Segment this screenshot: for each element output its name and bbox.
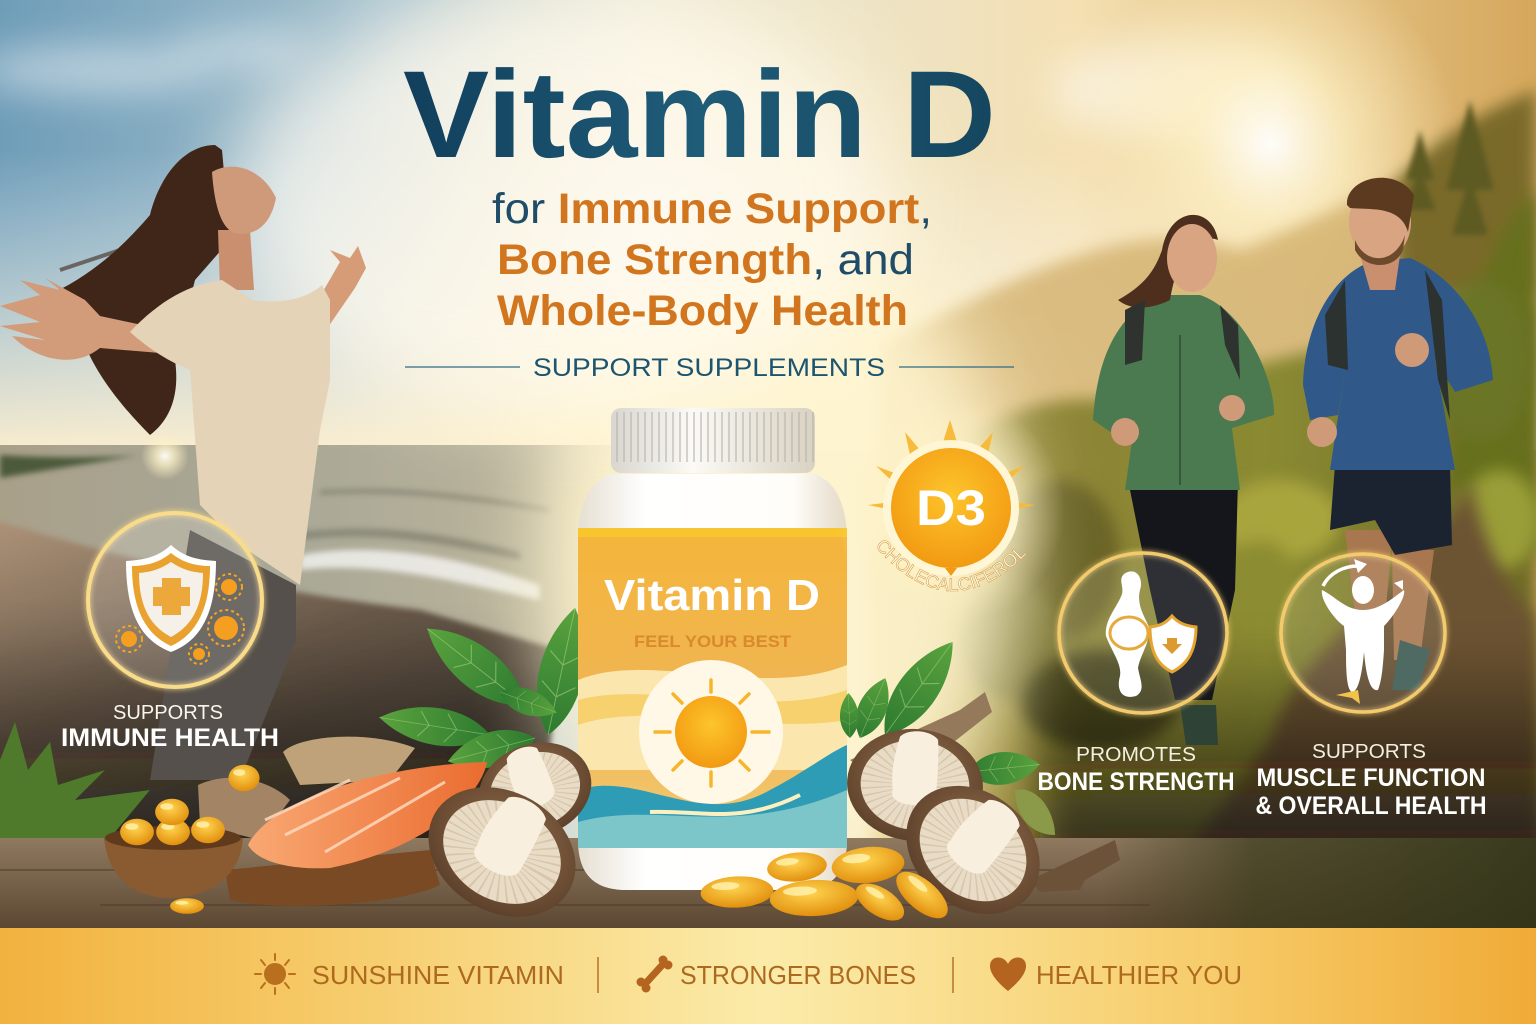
left arm: [0, 278, 175, 360]
supplement bottle: [578, 408, 847, 890]
sea: [0, 445, 760, 680]
benefit: muscle function: & OVERALL HEALTH: [1256, 792, 1486, 820]
mushrooms left: [405, 727, 605, 943]
glow behind bottle: [540, 230, 1020, 890]
shield icon: [1150, 616, 1196, 672]
bottom banner: [0, 928, 1536, 1024]
bottle cap: [611, 408, 815, 473]
title: Vitamin D: [403, 46, 996, 184]
food right: [700, 630, 1120, 941]
wooden table: [0, 838, 1536, 930]
neck: [218, 230, 254, 290]
face: [212, 167, 276, 234]
ring: [1059, 553, 1227, 713]
virus icons: [116, 574, 244, 664]
tagline: SUPPORT SUPPLEMENTS: [533, 354, 885, 382]
joint icon: [1106, 571, 1150, 697]
ring: [1281, 554, 1445, 712]
woman jogger: [1093, 215, 1274, 745]
icon: heart: [990, 957, 1026, 991]
beach foliage: [0, 722, 150, 838]
cholecalciferol arc text: [875, 546, 1034, 591]
bottom darkening: [0, 620, 500, 880]
bowl: [104, 832, 243, 898]
icon: bone: [636, 956, 672, 992]
board: [225, 850, 440, 906]
right arm: [318, 246, 366, 330]
subtitle: Whole-Body Health: [497, 287, 908, 335]
label: PROMOTES: [1076, 744, 1196, 766]
label: sunshine vitamin: SUNSHINE VITAMIN: [312, 960, 564, 990]
vegetation: [870, 300, 1536, 930]
label: SUPPORTS: [1312, 741, 1426, 763]
icon: sun: [255, 954, 295, 994]
shield icon: [126, 545, 216, 652]
subtitle: Bone Strength , and: [497, 236, 914, 284]
bottle body: [578, 474, 847, 890]
man jogger: [1303, 178, 1493, 690]
benefit: muscle function: MUSCLE FUNCTION: [1256, 764, 1486, 792]
benefit: muscle function: [1256, 554, 1486, 820]
D3 badge: D3: [916, 480, 986, 536]
salmon: [248, 762, 487, 868]
label: SUPPORTS: [113, 702, 223, 724]
label: healthier you: HEALTHIER YOU: [1036, 960, 1242, 990]
benefit: bone strength: [1038, 553, 1234, 796]
motion arrow: [1323, 566, 1358, 586]
benefit: immune health: [61, 513, 279, 752]
label: [578, 528, 847, 848]
sweater: [130, 280, 330, 585]
benefit: bone strength: BONE STRENGTH: [1038, 768, 1234, 796]
waves: [578, 745, 847, 848]
hills: [880, 100, 1536, 600]
hair: [55, 145, 230, 435]
label text: Vitamin D: [604, 571, 820, 620]
label: stronger bones: STRONGER BONES: [680, 960, 916, 990]
subtitle: [492, 185, 932, 335]
woman on the beach: [0, 145, 366, 780]
D3 badge: [842, 420, 1059, 596]
subtitle: for Immune Support ,: [492, 185, 932, 233]
trail: [1130, 480, 1536, 930]
supplement bottle: FEEL YOUR BEST: [634, 632, 792, 651]
leaves: [376, 603, 597, 778]
softgels: [700, 875, 774, 909]
food left: [104, 603, 597, 914]
benefit: immune health: IMMUNE HEALTH: [61, 724, 279, 752]
person icon: [1322, 576, 1404, 692]
sand: [0, 515, 560, 850]
joggers: [1093, 178, 1493, 745]
ginger: [283, 737, 415, 785]
D3 badge: CHOLECALCIFEROL: [878, 540, 1027, 592]
ring: [88, 513, 262, 687]
sun emblem: [639, 660, 783, 804]
